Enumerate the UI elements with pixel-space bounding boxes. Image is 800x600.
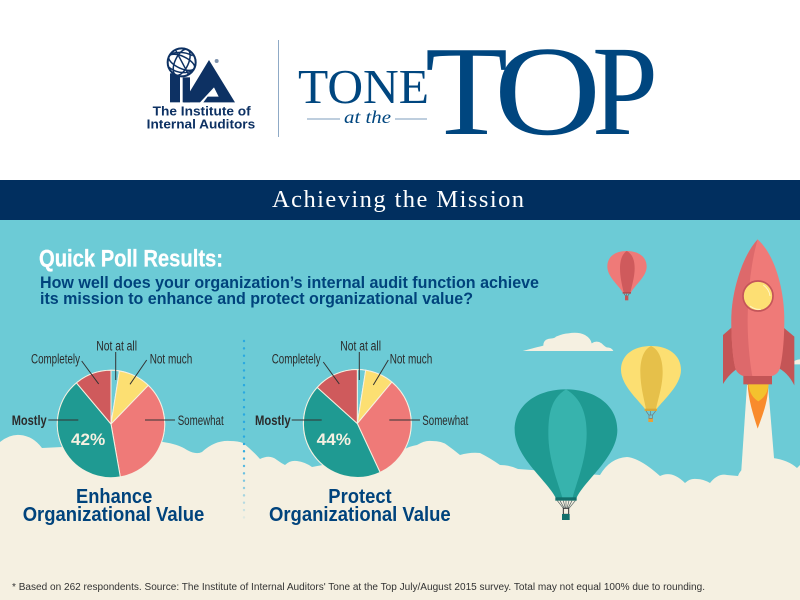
- divider: dotted line: [243, 341, 245, 522]
- poll question: its mission to enhance and protect organizational value?: [40, 290, 473, 308]
- window: [743, 281, 773, 311]
- pie chart: enhance: [57, 370, 165, 478]
- pie chart: protect: [303, 370, 411, 478]
- masthead: Tone at the Top: at the: [344, 107, 391, 127]
- value: 42%: 42%: [71, 431, 106, 449]
- footnote: * Based on 262 respondents. Source: The Institute of Internal Auditors' Tone at the Top July/August 2015 survey. Total may not equal 100% due to rounding.: [12, 582, 705, 593]
- fins: [723, 326, 744, 384]
- icon: IIA letters: [170, 59, 235, 102]
- leader lines: [48, 352, 175, 420]
- header logo: The Institute of Internal Auditors: [147, 47, 255, 132]
- chart heading: Organizational Value: [269, 503, 451, 526]
- category labels: Mostly: [12, 413, 47, 428]
- leader lines: [292, 352, 420, 420]
- category labels: [12, 339, 224, 428]
- masthead: Tone at the Top: [298, 20, 658, 162]
- poll question: How well does your organization’s internal audit function achieve: [40, 274, 539, 292]
- panel: protect organizational value: [255, 339, 468, 526]
- banner: Achieving the Mission: Achieving the Mission: [272, 186, 524, 213]
- poll question: [40, 274, 539, 308]
- icon: globe: [166, 47, 197, 78]
- masthead: Tone at the Top: P: [592, 20, 658, 162]
- small cloud: [523, 333, 613, 351]
- nozzle: [743, 376, 772, 384]
- category labels: Completely: [272, 351, 321, 366]
- cloud behind rocket: [794, 359, 800, 364]
- category labels: Completely: [31, 351, 80, 366]
- cloud bank: [0, 435, 800, 600]
- icon: rocket: [723, 239, 794, 429]
- chart heading: Organizational Value: [23, 503, 204, 526]
- chart heading: Protect: [328, 485, 392, 508]
- category labels: Somewhat: [422, 413, 468, 428]
- masthead: Tone at the Top: O: [494, 20, 601, 162]
- masthead: Tone at the Top: TONE: [298, 59, 429, 114]
- icon: teal balloon: [515, 389, 617, 520]
- chart heading: Enhance: [76, 485, 152, 508]
- category labels: Not much: [390, 351, 432, 366]
- exhaust flame: [748, 384, 768, 429]
- text: institute name: Internal Auditors: [147, 118, 255, 132]
- banner: Achieving the Mission: [0, 180, 800, 220]
- icon: red balloon: [607, 251, 647, 300]
- icon: yellow balloon: [621, 346, 681, 422]
- category labels: Not at all: [96, 339, 137, 354]
- chart heading: [269, 485, 451, 526]
- poll heading: Quick Poll Results:: [39, 246, 223, 272]
- text: institute name: [147, 104, 255, 132]
- text: institute name: The Institute of: [153, 104, 252, 118]
- chart heading: [23, 485, 204, 526]
- masthead: Tone at the Top: T: [425, 20, 508, 162]
- category labels: Not at all: [340, 339, 381, 354]
- value: 44%: 44%: [317, 431, 351, 449]
- category labels: [255, 339, 468, 428]
- illustration: balloons, clouds and rocket: [515, 239, 800, 520]
- rocket body: [731, 239, 784, 376]
- category labels: Mostly: [255, 413, 291, 428]
- panel: enhance organizational value: [12, 339, 224, 526]
- category labels: Somewhat: [178, 413, 224, 428]
- rocket smoke trail: [741, 385, 775, 475]
- category labels: Not much: [150, 351, 192, 366]
